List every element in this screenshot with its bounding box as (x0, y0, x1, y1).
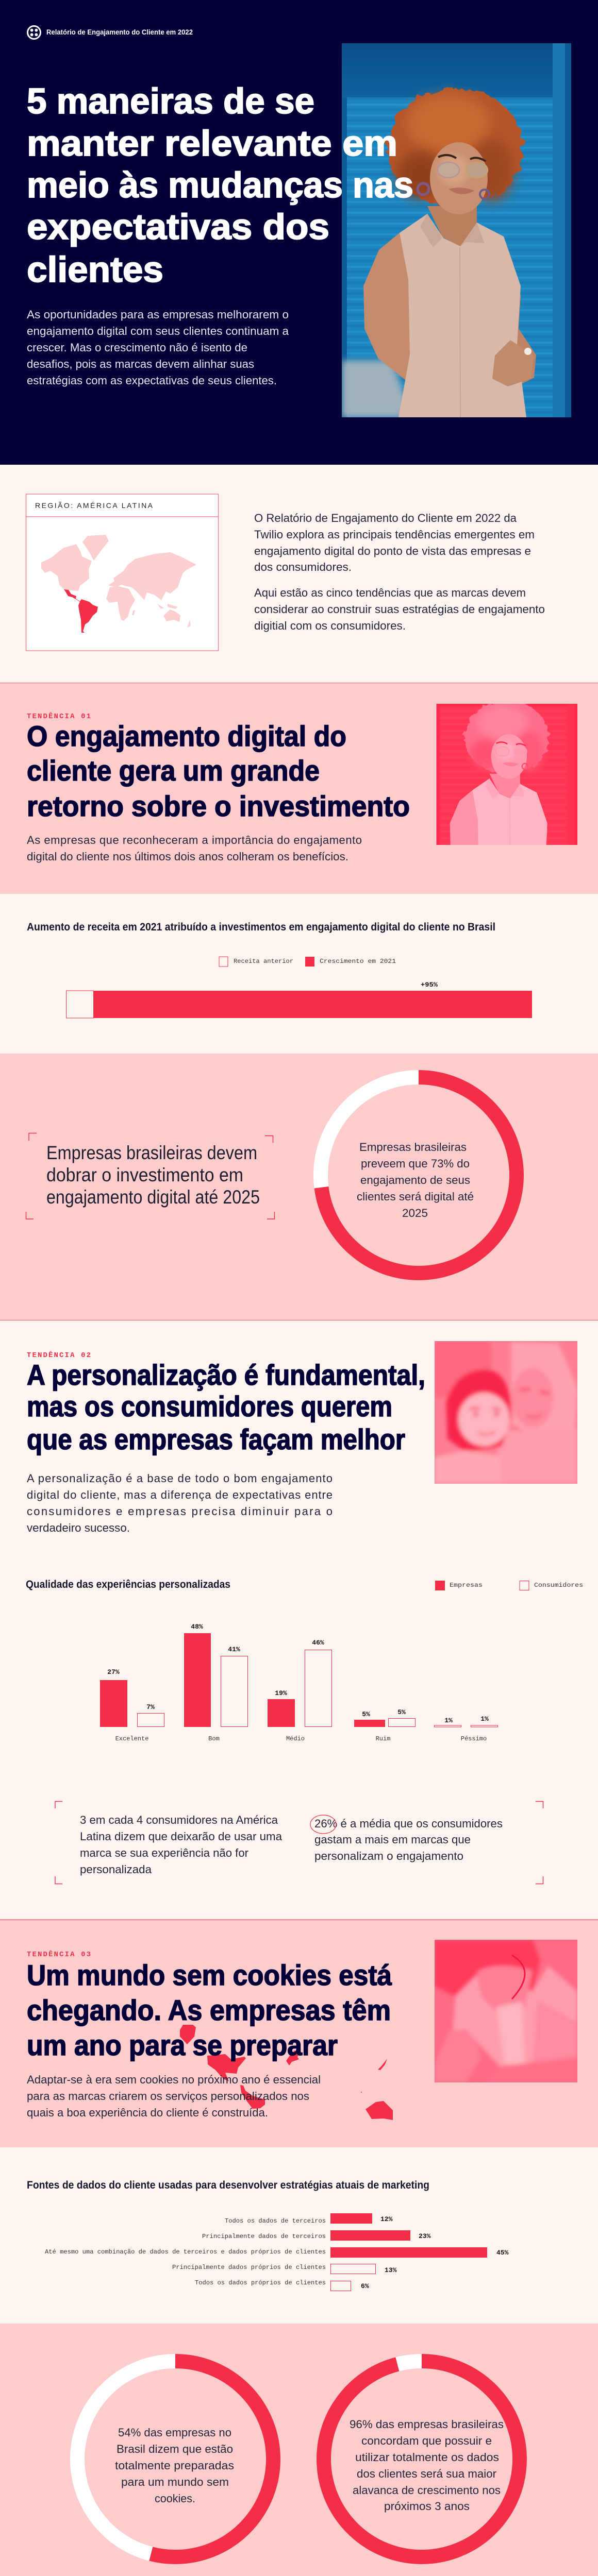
left stat: marca se sua experiência não for (80, 1846, 248, 1859)
row: 45% (45, 2247, 509, 2258)
heading (27, 1959, 392, 2061)
description: para as marcas criarem os serviços personalizados nos (27, 2090, 309, 2103)
bars: Bom: Bom (208, 1735, 220, 1742)
row: 6%: Todos os dados próprios de clientes (195, 2279, 326, 2286)
row: 6% (195, 2279, 369, 2291)
bars: Bom: 48% (191, 1623, 203, 1631)
panel: trend 03 donuts (0, 2324, 598, 2576)
donut 54% (77, 2361, 273, 2557)
donut 54% text: cookies. (155, 2492, 195, 2505)
map fragments behind text (180, 2025, 393, 2120)
bars: Ruim: Ruim (376, 1735, 390, 1742)
donut text: preveem que 73% do (361, 1157, 470, 1170)
left stat: Latina dizem que deixarão de usar uma (80, 1830, 283, 1843)
bars: Excelente: 27% (107, 1668, 120, 1676)
panel: trend 03 header (0, 1920, 598, 2147)
region label: REGIÃO: AMÉRICA LATINA (35, 501, 153, 510)
chart title: Qualidade das experiências personalizadas (26, 1579, 230, 1590)
donut 96% text: 96% das empresas brasileiras (350, 2418, 504, 2431)
donut 96% text: alavanca de crescimento nos (353, 2484, 501, 2497)
intro text: digitial com os consumidores. (254, 619, 406, 632)
panel: trend 01 header (0, 673, 598, 905)
bars: Péssimo: 1% (480, 1715, 489, 1723)
chart title: Fontes de dados do cliente usadas para desenvolver estratégias atuais de marketing (27, 2179, 429, 2191)
description (27, 2073, 321, 2119)
legend (219, 957, 396, 967)
heading: A personalização é fundamental, (27, 1359, 425, 1391)
heading: um ano para se preparar (27, 2029, 338, 2061)
bars: Ruim: 5% (397, 1708, 406, 1716)
panel: data sources chart background (0, 2147, 598, 2324)
bars: Excelente: 7% (146, 1703, 155, 1711)
row: 6%: 6% (361, 2282, 369, 2290)
donut text: clientes será digital até (357, 1190, 474, 1203)
donut 96% text: próximos 3 anos (384, 2500, 470, 2513)
right stat: personalizam o engajamento (314, 1850, 463, 1862)
row: 23%: Principalmente dados de terceiros (202, 2233, 326, 2240)
heading: O engajamento digital do (27, 720, 346, 752)
bars: Péssimo: 1% (444, 1717, 453, 1724)
heading: chegando. As empresas têm (27, 1994, 391, 2026)
description: quais a boa experiência do cliente é construída. (27, 2106, 268, 2119)
donut 96% text (350, 2418, 504, 2513)
tag: TENDÊNCIA 01 (27, 711, 91, 721)
main title (27, 81, 413, 290)
heading (27, 720, 410, 822)
bars: Bom: 41% (228, 1646, 240, 1653)
main title: clientes (27, 249, 163, 290)
hero description: desafios, pois as marcas devem alinhar suas (27, 358, 254, 370)
bars: Bom (184, 1623, 247, 1742)
description: digital do cliente, mas a diferença de expectativas entre (27, 1488, 333, 1501)
trend 02 header (27, 1341, 577, 1534)
legend (435, 1581, 583, 1590)
legend: Crescimento em 2021 (320, 958, 396, 965)
bars: Ruim: 5% (362, 1710, 370, 1718)
intro text: dos consumidores. (254, 561, 352, 573)
main title: manter relevante em (27, 123, 397, 163)
intro text: engajamento digital do ponto de vista das empresas e (254, 545, 531, 557)
hero photo: woman in front of blue shutter (342, 43, 571, 417)
panel: trend 01 callout (0, 1054, 598, 1320)
panel: trend 02 background (0, 1320, 598, 1920)
bars: Péssimo (434, 1715, 498, 1742)
description: consumidores e empresas precisa diminuir para o (27, 1505, 333, 1518)
panel: revenue chart background (0, 894, 598, 1054)
tag: TENDÊNCIA 02 (27, 1350, 91, 1360)
description: As empresas que reconheceram a importância do engajamento (27, 834, 362, 846)
corner brackets (55, 1801, 543, 1884)
heading: que as empresas façam melhor (27, 1423, 405, 1455)
heading: retorno sobre o investimento (27, 790, 410, 822)
bars: Médio: 46% (312, 1639, 324, 1647)
donut text: engajamento de seus (360, 1174, 470, 1187)
hand-drawn circle (310, 1815, 336, 1834)
row: 45%: 45% (496, 2249, 509, 2257)
legend: Empresas (450, 1582, 483, 1589)
left stat: personalizada (80, 1863, 152, 1876)
legend: Consumidores (534, 1582, 583, 1589)
bars: Excelente (100, 1668, 164, 1742)
report logo line (28, 26, 193, 39)
revenue chart (27, 921, 532, 1018)
bars: Péssimo: Péssimo (461, 1735, 487, 1742)
quality bar chart (26, 1579, 583, 1742)
quote text: Empresas brasileiras devem (46, 1142, 257, 1163)
main title: meio às mudanças nas (27, 165, 413, 205)
description: Adaptar-se à era sem cookies no próximo ano é essencial (27, 2073, 321, 2086)
quote text (46, 1142, 260, 1208)
hero description: estratégias com as expectativas de seus clientes. (27, 374, 277, 387)
bars: Ruim (354, 1708, 416, 1742)
hero description: engajamento digital com seus clientes continuam a (27, 325, 289, 337)
corner brackets (26, 1133, 274, 1219)
row: 13%: Principalmente dados próprios de clientes (172, 2264, 326, 2271)
quote text: dobrar o investimento em (46, 1164, 243, 1185)
heading: cliente gera um grande (27, 754, 320, 787)
donut 54% text (115, 2426, 234, 2505)
description (27, 834, 362, 863)
photo: duotone woman (436, 704, 577, 845)
intro text: Twilio explora as principais tendências emergentes em (254, 528, 535, 541)
value label: +95% (421, 981, 438, 989)
row: 23% (202, 2230, 431, 2241)
heading: mas os consumidores querem (27, 1390, 392, 1422)
description (27, 1472, 333, 1534)
region map card (26, 494, 219, 651)
donut text (357, 1141, 474, 1219)
intro text: considerar ao construir suas estratégias de engajamento (254, 603, 545, 616)
row: 13%: 13% (385, 2266, 397, 2274)
panel: intro background (0, 465, 598, 683)
row: 45%: Até mesmo uma combinação de dados de terceiros e dados próprios de clientes (45, 2248, 326, 2256)
bars: Médio: 19% (275, 1689, 287, 1697)
intro text: O Relatório de Engajamento do Cliente em 2022 da (254, 512, 517, 524)
donut 96% (324, 2361, 520, 2557)
quote text: engajamento digital até 2025 (46, 1187, 260, 1208)
heading (27, 1359, 425, 1455)
description: verdadeiro sucesso. (27, 1521, 130, 1534)
row: 13% (172, 2264, 397, 2274)
panel: hero background (0, 0, 598, 465)
description: A personalização é a base de todo o bom engajamento (27, 1472, 333, 1485)
donut 73% (321, 1077, 517, 1273)
world map (41, 535, 196, 633)
photo: person writing (435, 1940, 577, 2082)
callout: personalization stats (55, 1801, 543, 1884)
heading: Um mundo sem cookies está (27, 1959, 392, 1991)
hero description: As oportunidades para as empresas melhorarem o (27, 308, 289, 321)
chart title: Aumento de receita em 2021 atribuído a investimentos em engajamento digital do cliente no Brasil (27, 921, 495, 933)
photo: mother and daughter (435, 1341, 577, 1484)
donut text: Empresas brasileiras (359, 1141, 467, 1154)
bars: Médio: Médio (286, 1735, 305, 1742)
donut 54% text: para um mundo sem (121, 2476, 229, 2488)
left stat (80, 1814, 283, 1876)
donut 54% text: Brasil dizem que estão (117, 2443, 233, 2455)
tag: TENDÊNCIA 03 (27, 1950, 91, 1959)
bars: Excelente: Excelente (115, 1735, 148, 1742)
intro text: Aqui estão as cinco tendências que as marcas devem (254, 586, 526, 599)
legend: Receita anterior (234, 958, 293, 965)
right stat (314, 1817, 503, 1862)
donut 96% text: dos clientes será sua maior (357, 2467, 496, 2480)
donut 54% text: totalmente preparadas (115, 2459, 234, 2472)
row: 12% (225, 2213, 393, 2225)
donut text: 2025 (402, 1207, 428, 1219)
main title: 5 maneiras de se (27, 81, 314, 121)
row: 23%: 23% (419, 2232, 431, 2240)
row: 12%: Todos os dados de terceiros (225, 2217, 326, 2225)
donut 96% text: utilizar totalmente os dados (355, 2451, 499, 2464)
description: digital do cliente nos últimos dois anos colheram os benefícios. (27, 850, 348, 863)
right stat: gastam a mais em marcas que (314, 1833, 471, 1846)
bar (66, 991, 532, 1018)
right stat: 26% é a média que os consumidores (314, 1817, 503, 1830)
hero description (27, 308, 289, 387)
data sources bar chart (27, 2179, 509, 2291)
hero description: crescer. Mas o crescimento não é isento de (27, 341, 247, 354)
report logo line: Relatório de Engajamento do Cliente em 2022 (46, 28, 193, 36)
row: 12%: 12% (380, 2215, 393, 2223)
main title: expectativas dos (27, 207, 329, 247)
bars: Médio (268, 1639, 332, 1742)
donut 96% text: concordam que possuir e (361, 2434, 492, 2447)
intro text (254, 512, 545, 632)
donut 54% text: 54% das empresas no (118, 2426, 231, 2439)
left stat: 3 em cada 4 consumidores na América (80, 1814, 278, 1826)
